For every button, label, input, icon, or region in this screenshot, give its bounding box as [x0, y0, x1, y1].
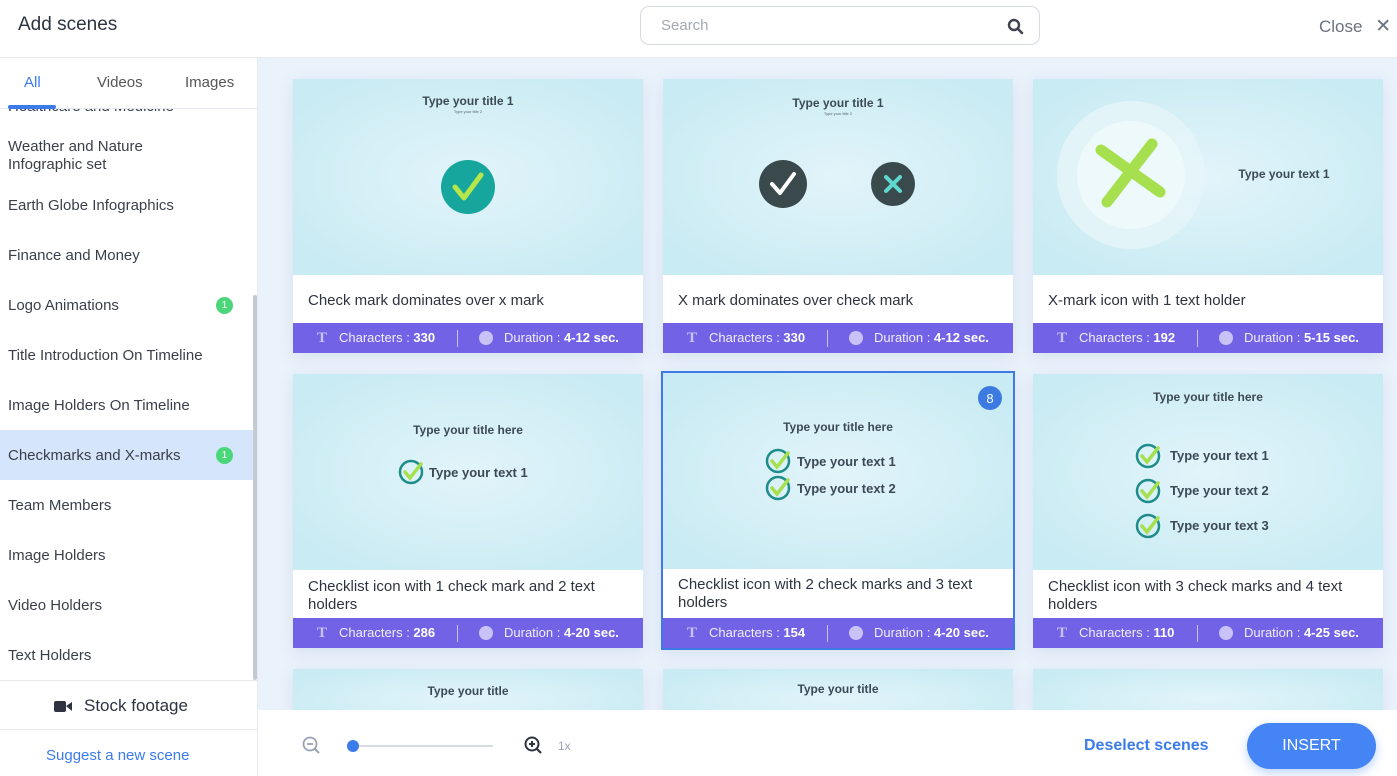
deselect link: Deselect scenes	[1084, 737, 1209, 754]
card 3: T	[1057, 330, 1067, 346]
category list: Finance and Money	[8, 247, 140, 264]
category list: 1	[222, 300, 227, 311]
zoom slider	[302, 736, 571, 754]
zoom slider: 1x	[558, 739, 571, 753]
category list	[0, 109, 257, 680]
card 5 selected: 8	[986, 391, 994, 406]
card 4: Type your text 1	[429, 465, 528, 480]
card 3: Characters : 192	[1079, 330, 1175, 345]
card 2: Duration : 4-12 sec.	[874, 330, 989, 345]
card 4: T	[317, 625, 327, 641]
card 1: Type your title 2	[454, 109, 483, 114]
insert button: INSERT	[1282, 737, 1341, 754]
card row 3 partial 3	[1033, 669, 1383, 729]
tabs	[0, 58, 257, 109]
tabs: All	[24, 74, 41, 91]
card 5 selected: Checklist icon with 2 check marks and 3 text holders	[678, 576, 972, 611]
category list: Weather and Nature	[8, 138, 143, 155]
card 1	[293, 79, 643, 353]
card row 3 partial 2: Type your title	[797, 682, 879, 696]
card 5 selected: Characters : 154	[709, 625, 805, 640]
card 6: Type your text 2	[1170, 483, 1269, 498]
card 3: Duration : 5-15 sec.	[1244, 330, 1359, 345]
bottom toolbar	[258, 710, 1397, 776]
card 5 selected: Type your title here	[783, 420, 893, 434]
search box	[640, 6, 1040, 45]
card 2: Type your title 1	[792, 96, 884, 110]
tabs: Images	[185, 74, 234, 91]
category list: Image Holders	[8, 547, 106, 564]
tabs: Videos	[97, 74, 143, 91]
card 3: Type your text 1	[1238, 167, 1330, 181]
card row 3 partial	[293, 669, 643, 729]
insert button	[1247, 723, 1376, 769]
card 6: Characters : 110	[1079, 625, 1174, 640]
card 2: Type your title 2	[824, 111, 853, 116]
card 1: Characters : 330	[339, 330, 435, 345]
card 5 selected: T	[687, 625, 697, 641]
card 6: Type your text 3	[1170, 518, 1269, 533]
card 4	[293, 374, 643, 648]
card 2: T	[687, 330, 697, 346]
stock footage	[0, 680, 257, 730]
category list: Video Holders	[8, 597, 102, 614]
stock footage: Stock footage	[84, 696, 188, 715]
card 5 selected: Duration : 4-20 sec.	[874, 625, 989, 640]
card 2	[663, 79, 1013, 353]
search box: Search	[661, 17, 709, 34]
card 3: X-mark icon with 1 text holder	[1048, 292, 1246, 309]
title: Add scenes	[18, 14, 117, 35]
header	[0, 0, 1397, 58]
card 1: T	[317, 330, 327, 346]
card 6: Type your title here	[1153, 390, 1263, 404]
card 6: T	[1057, 625, 1067, 641]
card 3	[1033, 79, 1383, 353]
category list: Infographic set	[8, 156, 106, 173]
category list: Logo Animations	[8, 297, 119, 314]
card 4: Checklist icon with 1 check mark and 2 text holders	[308, 578, 595, 613]
category list: Checkmarks and X-marks	[8, 447, 181, 464]
card row 3 partial 2	[663, 669, 1013, 729]
card 5 selected: Type your text 2	[797, 481, 896, 496]
card 2: Characters : 330	[709, 330, 805, 345]
close button: Close ✕	[1319, 16, 1391, 37]
category list: Text Holders	[8, 647, 91, 664]
category list: Earth Globe Infographics	[8, 197, 174, 214]
card 5 selected: Type your text 1	[797, 454, 896, 469]
card 6: Duration : 4-25 sec.	[1244, 625, 1359, 640]
card 6: Type your text 1	[1170, 448, 1269, 463]
card row 3 partial: Type your title	[427, 684, 509, 698]
card 5 selected	[661, 371, 1015, 650]
sidebar	[0, 58, 258, 776]
card 4: Characters : 286	[339, 625, 435, 640]
category list: Image Holders On Timeline	[8, 397, 190, 414]
main area	[258, 58, 1397, 710]
card 1: Duration : 4-12 sec.	[504, 330, 619, 345]
category list: Title Introduction On Timeline	[8, 347, 203, 364]
card 6	[1033, 374, 1383, 648]
category list: 1	[222, 450, 227, 461]
suggest link: Suggest a new scene	[46, 747, 189, 764]
card 1: Check mark dominates over x mark	[308, 292, 544, 309]
card 1: Type your title 1	[422, 94, 514, 108]
card 2: X mark dominates over check mark	[678, 292, 913, 309]
card 4: Duration : 4-20 sec.	[504, 625, 619, 640]
card 6: Checklist icon with 3 check marks and 4 text holders	[1048, 578, 1342, 613]
category list: Team Members	[8, 497, 111, 514]
card 4: Type your title here	[413, 423, 523, 437]
